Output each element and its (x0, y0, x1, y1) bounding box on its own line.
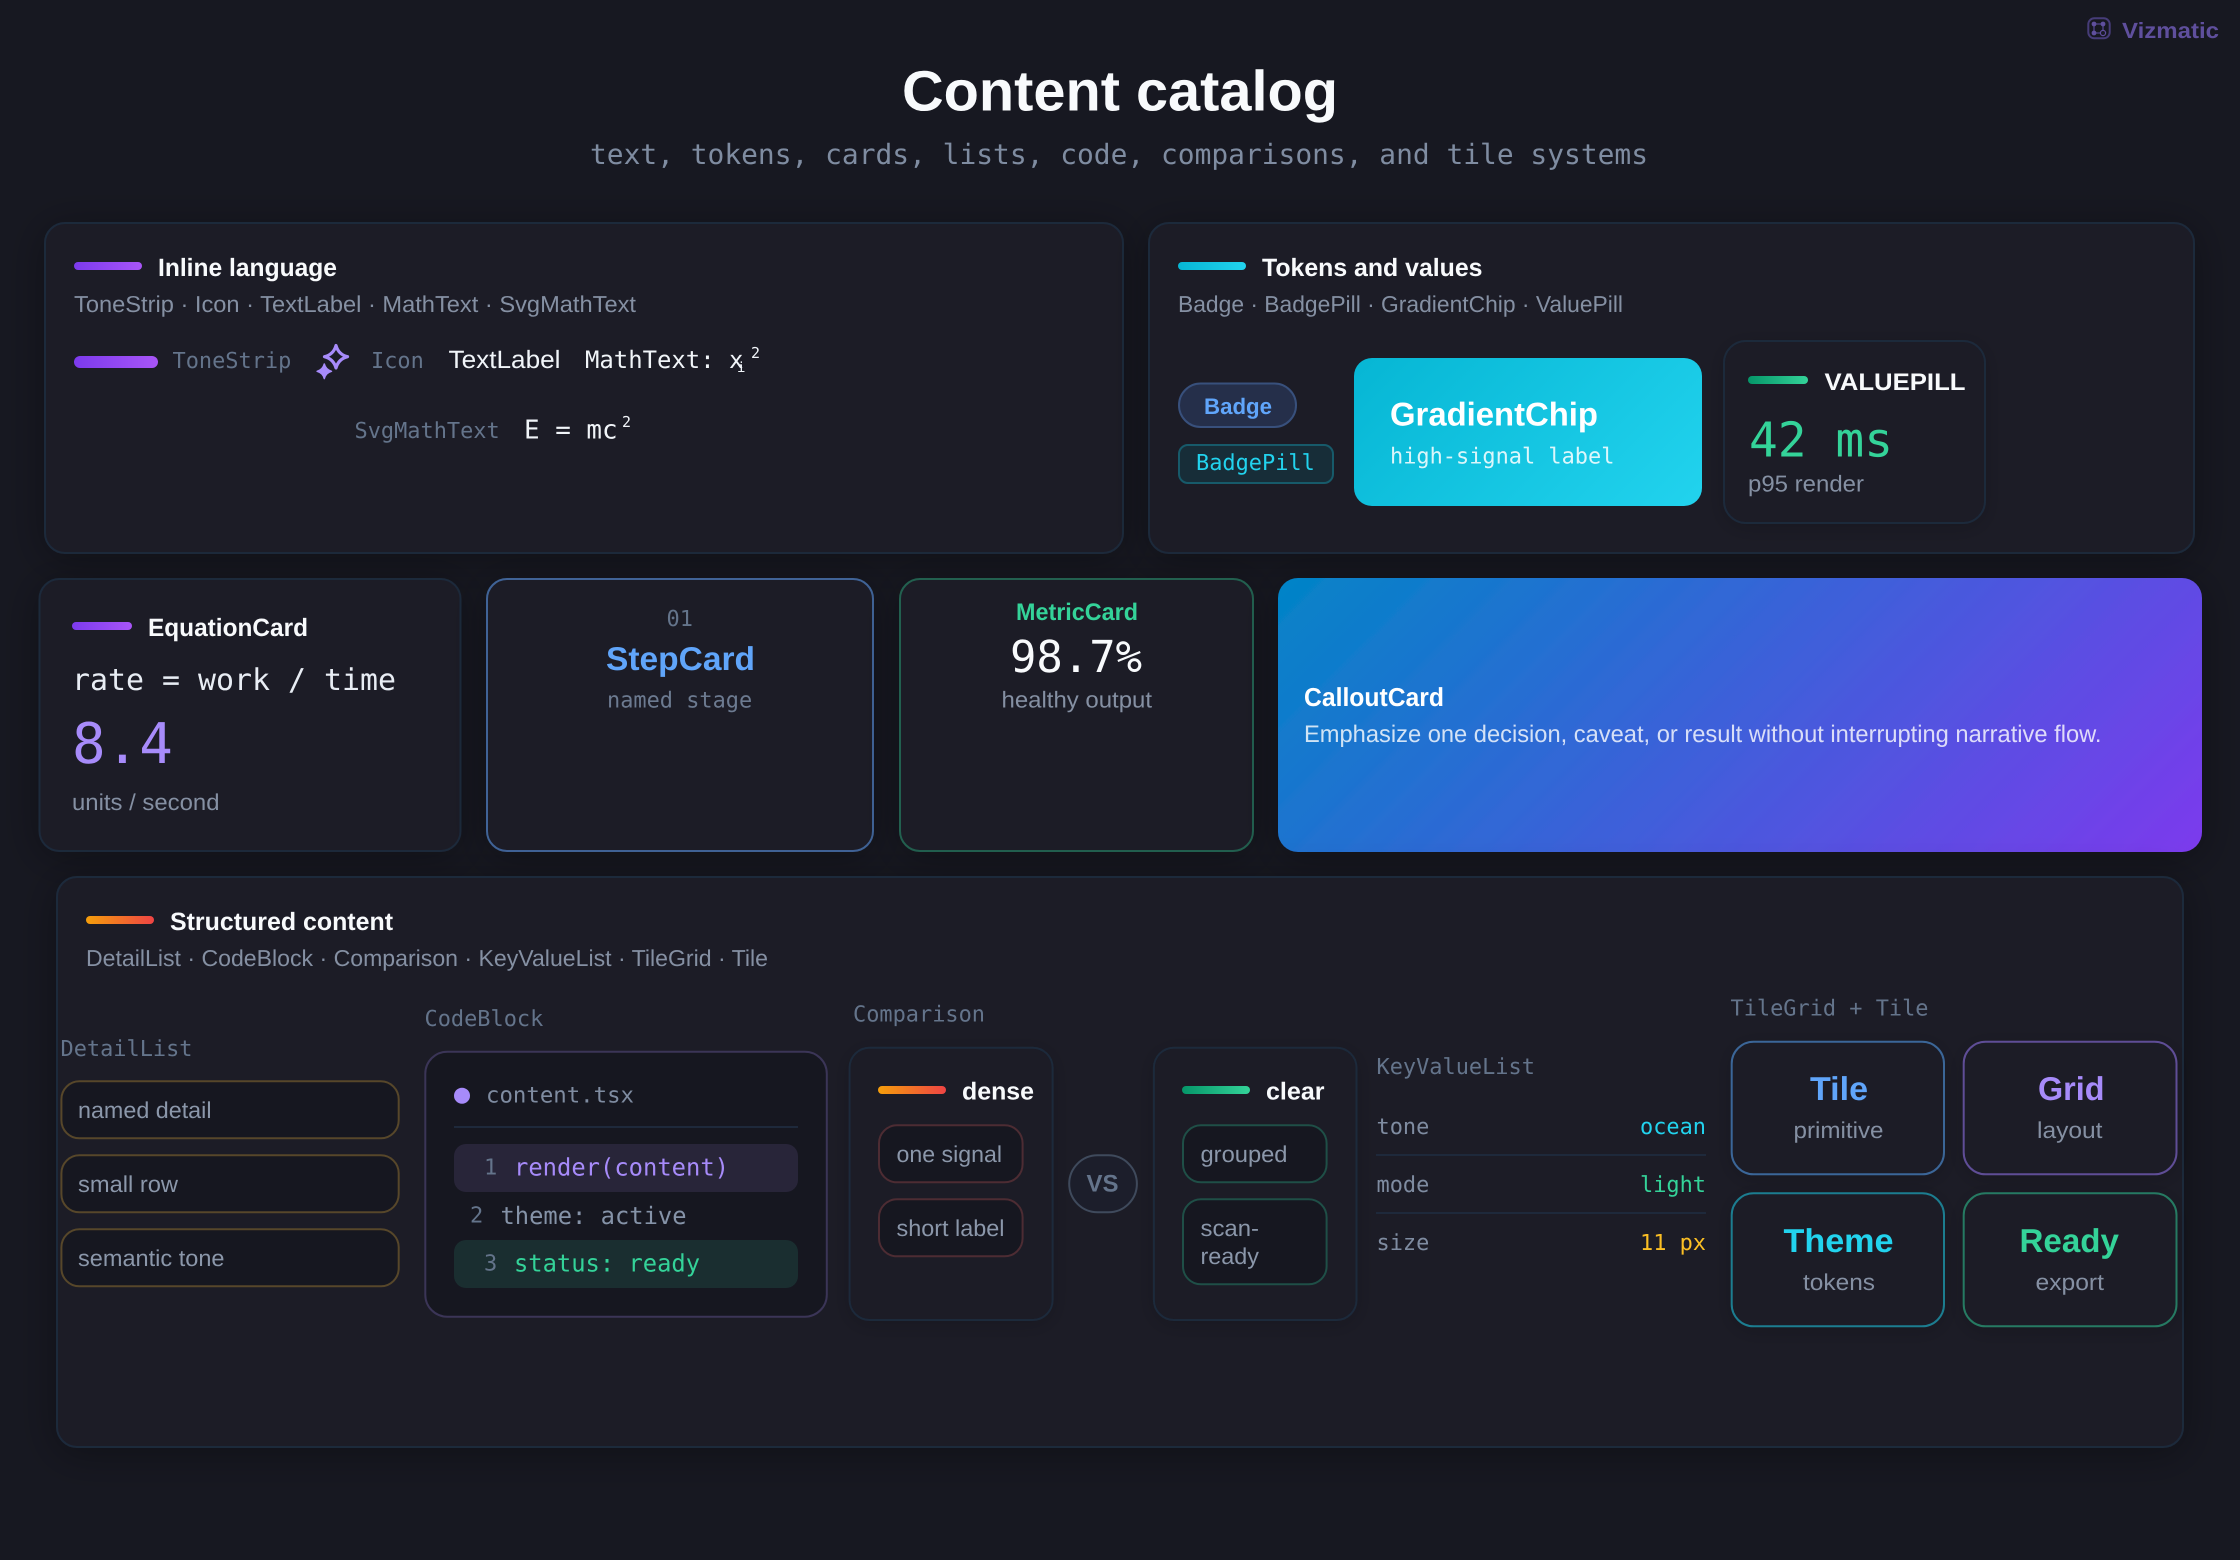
brand name: Vizmatic (2122, 18, 2219, 43)
SvgMathText equation: 2 (622, 413, 631, 431)
comparison side: dense: dense (962, 1078, 1034, 1106)
tile: Theme: tokens (1803, 1269, 1875, 1295)
comparison side: clear (1154, 1048, 1356, 1320)
metric caption: healthy output (1002, 686, 1153, 712)
row: size (1376, 1231, 1706, 1256)
tone strip: heading accent (86, 916, 154, 924)
MathText sample: MathText: x (585, 346, 743, 374)
code window (425, 1052, 827, 1317)
tone strip: heading accent (1178, 262, 1246, 270)
panel subtitle: ToneStrip · Icon · TextLabel · MathText · SvgMathText (74, 291, 637, 317)
tile: Ready: export (2036, 1269, 2105, 1295)
MathText sample: i (737, 360, 745, 376)
GradientChip: high-signal label (1390, 444, 1614, 470)
step caption: named stage (607, 688, 752, 714)
tone strip: heading accent (74, 262, 142, 270)
code line 3: 3 (484, 1252, 497, 1276)
CodeBlock (424, 1007, 827, 1317)
tile: Ready: Ready (2020, 1222, 2120, 1259)
metric value: 98.7% (1010, 632, 1142, 683)
code line 3 (454, 1240, 798, 1288)
tile: Grid (1964, 1042, 2176, 1174)
item: grouped: grouped (1200, 1141, 1288, 1167)
step title: StepCard (606, 640, 755, 677)
item: short label: short label (896, 1215, 1004, 1241)
GradientChip: GradientChip (1390, 396, 1598, 432)
panel subtitle: DetailList · CodeBlock · Comparison · KeyValueList · TileGrid · Tile (86, 945, 768, 971)
icon: Vizmatic logo (2088, 18, 2110, 38)
CalloutCard (1278, 578, 2202, 852)
VS badge (1069, 1155, 1137, 1212)
tile: Grid: layout (2037, 1117, 2103, 1143)
code line 1: 1 (484, 1156, 497, 1180)
code line 1: render(content) (514, 1154, 729, 1182)
item: scan-ready (1183, 1199, 1327, 1284)
KeyValueList label: KeyValueList (1376, 1055, 1535, 1080)
status dot (454, 1088, 470, 1104)
heading: Inline language: Inline language (158, 254, 337, 282)
row: mode: mode (1376, 1173, 1429, 1198)
icon: sparkles (317, 346, 348, 379)
DetailList (60, 1037, 399, 1286)
row: size: size (1376, 1231, 1429, 1256)
callout body: Emphasize one decision, caveat, or result without interrupting narrative flow. (1304, 721, 2102, 748)
item: scan-ready: ready (1200, 1243, 1259, 1269)
code line 1 (454, 1144, 798, 1192)
Badge: Badge (1204, 394, 1272, 419)
ValuePill value: 42 ms (1749, 412, 1893, 468)
detail row: semantic tone: semantic tone (78, 1245, 224, 1271)
item: one signal (879, 1125, 1023, 1182)
DetailList label: DetailList (60, 1037, 192, 1062)
item: grouped (1183, 1125, 1327, 1182)
panel: Structured content (57, 877, 2183, 1447)
SvgMathText equation: E = mc (524, 416, 618, 446)
MathText sample: 2 (751, 344, 760, 362)
title: Content catalog (902, 60, 1338, 124)
file name: content.tsx (486, 1084, 634, 1108)
panel: Inline language (45, 223, 1123, 553)
row: tone (1376, 1115, 1706, 1140)
metric label: MetricCard (1016, 599, 1138, 626)
BadgePill (1179, 445, 1333, 483)
KeyValueList (1376, 1055, 1706, 1256)
panel: Tokens and values (1149, 223, 2194, 553)
tile: Tile: primitive (1794, 1117, 1884, 1143)
comparison side: clear: clear (1266, 1078, 1325, 1106)
GradientChip (1354, 358, 1702, 506)
TileGrid label: TileGrid + Tile (1730, 996, 1928, 1022)
row: mode (1376, 1173, 1706, 1198)
ToneStrip label: ToneStrip (172, 349, 291, 374)
TileGrid (1730, 996, 2176, 1326)
heading: Tokens and values: Tokens and values (1262, 254, 1482, 282)
detail row: small row (61, 1155, 399, 1212)
item: scan-ready: scan- (1200, 1215, 1259, 1241)
tile: Grid: Grid (2038, 1070, 2104, 1107)
SvgMathText label: SvgMathText (354, 419, 500, 444)
tile: Tile: Tile (1810, 1070, 1868, 1107)
ValuePill tone strip (1748, 376, 1808, 384)
item: short label (879, 1199, 1023, 1256)
code line 3: status: ready (514, 1250, 700, 1278)
tile: Tile (1732, 1042, 1944, 1174)
detail row: semantic tone (61, 1229, 399, 1286)
card heading: EquationCard (148, 614, 308, 642)
row: tone: tone (1376, 1115, 1429, 1140)
Badge (1179, 384, 1296, 427)
tile: Theme: Theme (1784, 1222, 1894, 1259)
subtitle: text, tokens, cards, lists, code, comparisons, and tile systems (590, 138, 1648, 171)
BadgePill: BadgePill (1196, 451, 1315, 476)
Comparison label: Comparison (853, 1002, 985, 1028)
row: size: 11 px (1640, 1231, 1706, 1256)
detail row: small row: small row (78, 1171, 178, 1197)
item: one signal: one signal (896, 1141, 1002, 1167)
heading: Structured content: Structured content (170, 908, 394, 936)
tile: Theme (1732, 1193, 1944, 1326)
callout heading: CalloutCard (1304, 682, 1444, 712)
equation: rate = work / time (72, 663, 396, 698)
Comparison (850, 1002, 1356, 1320)
ValuePill label: VALUEPILL (1824, 369, 1966, 396)
detail row: named detail (61, 1081, 399, 1138)
ToneStrip sample (74, 356, 158, 368)
MetricCard (900, 579, 1253, 851)
code line 2: theme: active (500, 1202, 686, 1230)
comparison side: dense (850, 1048, 1053, 1320)
detail row: named detail: named detail (78, 1097, 212, 1123)
step number: 01 (666, 607, 693, 632)
equation result: 8.4 (72, 712, 173, 777)
row: tone: ocean (1640, 1115, 1706, 1140)
VS badge: VS (1086, 1170, 1118, 1198)
panel subtitle: Badge · BadgePill · GradientChip · ValuePill (1178, 291, 1623, 317)
EquationCard (40, 579, 460, 851)
equation unit: units / second (72, 789, 219, 815)
tile: Ready (1964, 1193, 2176, 1326)
tone strip (72, 622, 132, 630)
TextLabel sample: TextLabel (448, 346, 560, 374)
StepCard (487, 579, 873, 851)
watermark: Vizmatic (2088, 18, 2219, 43)
Icon label: Icon (371, 349, 424, 374)
ValuePill (1724, 341, 1985, 523)
code line 2: 2 (470, 1204, 483, 1228)
ValuePill caption: p95 render (1748, 470, 1864, 496)
row: mode: light (1640, 1173, 1706, 1198)
CodeBlock label: CodeBlock (424, 1007, 543, 1032)
